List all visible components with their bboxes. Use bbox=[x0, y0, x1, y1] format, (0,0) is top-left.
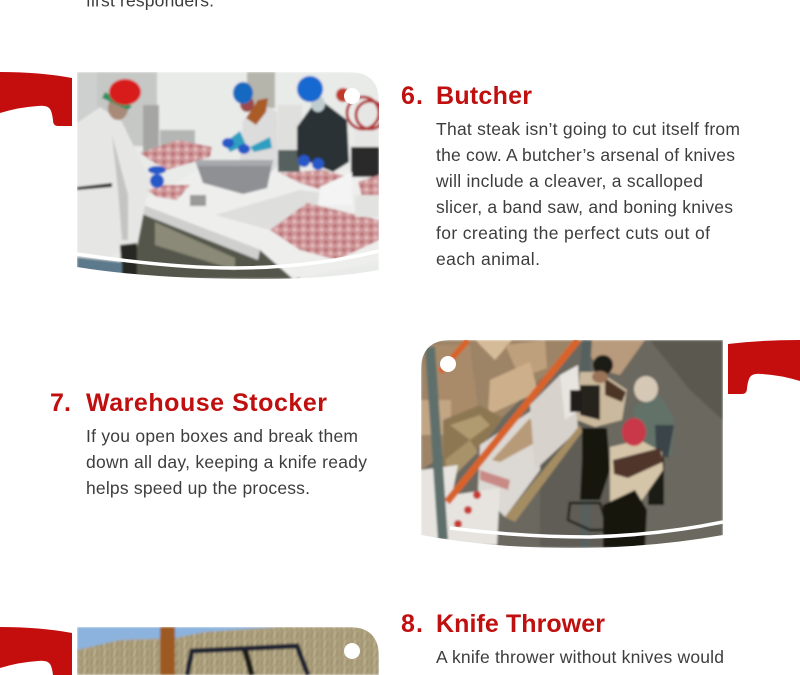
rear boxes bbox=[580, 340, 645, 375]
under table bbox=[134, 214, 301, 279]
cart bbox=[568, 503, 608, 530]
heading: warehouse stocker: 7. bbox=[50, 389, 71, 417]
photo: knife thrower bbox=[77, 627, 379, 675]
grey tub bbox=[196, 164, 272, 195]
text block: warehouse stocker: helps speed up the process. bbox=[86, 478, 310, 498]
meat bbox=[140, 140, 212, 170]
photo: butcher bbox=[77, 72, 384, 279]
text block: knife thrower: A knife thrower without knives would bbox=[436, 647, 724, 667]
text block: warehouse stocker: If you open boxes and break them bbox=[86, 426, 358, 446]
text block: butcher: That steak isn’t going to cut itself from bbox=[436, 119, 740, 139]
left worker bbox=[77, 107, 145, 247]
uprights bbox=[430, 347, 443, 540]
text block: butcher bbox=[435, 119, 740, 269]
text block: warehouse stocker bbox=[86, 426, 367, 498]
photo: warehouse bbox=[421, 340, 723, 548]
text block: warehouse stocker: down all day, keeping a knife ready bbox=[86, 452, 367, 472]
background people and coil bbox=[355, 103, 379, 149]
middle worker bbox=[240, 104, 278, 172]
man one bbox=[580, 428, 610, 500]
heading: warehouse stocker: Warehouse Stocker bbox=[86, 389, 327, 417]
red ribbon: warehouse bbox=[728, 340, 800, 394]
hanging hole: knife thrower bbox=[344, 643, 360, 659]
text block: butcher: slicer, a band saw, and boning knives bbox=[436, 197, 733, 217]
metal target frame bbox=[187, 646, 308, 675]
man two bbox=[634, 396, 674, 454]
orange beam bbox=[447, 340, 578, 502]
hanging hole: butcher bbox=[344, 88, 360, 104]
text block: butcher: each animal. bbox=[436, 249, 540, 269]
heading: butcher: Butcher bbox=[436, 82, 532, 110]
wooden post bbox=[160, 627, 175, 675]
white curve bbox=[450, 522, 723, 537]
heading: butcher: 6. bbox=[401, 82, 423, 110]
red ribbon: knife thrower bbox=[0, 627, 72, 675]
heading: knife thrower: Knife Thrower bbox=[436, 610, 605, 638]
shelf upper boxes bbox=[421, 340, 580, 470]
person three bbox=[610, 440, 663, 510]
hanging hole: warehouse bbox=[440, 356, 456, 372]
red ribbon: butcher bbox=[0, 72, 72, 126]
table bbox=[144, 204, 302, 278]
text block: butcher: will include a cleaver, a scalloped bbox=[435, 171, 703, 191]
text block: butcher: the cow. A butcher’s arsenal of knives bbox=[436, 145, 735, 165]
text block: butcher: for creating the perfect cuts out of bbox=[436, 223, 710, 243]
heading: knife thrower: 8. bbox=[401, 610, 423, 638]
right worker bbox=[297, 98, 349, 172]
lower white goods bbox=[478, 405, 540, 517]
white curve bbox=[77, 251, 379, 268]
